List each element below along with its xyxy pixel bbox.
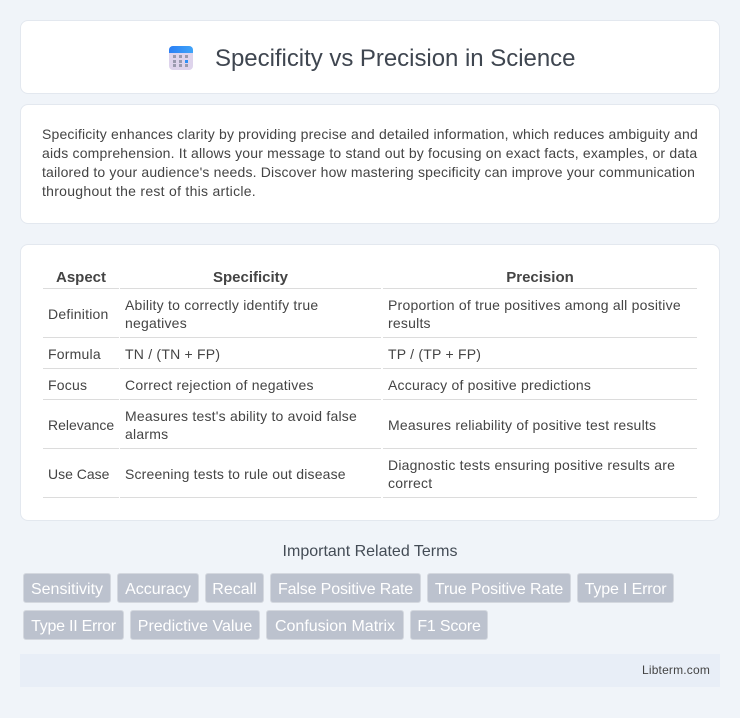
tag: Sensitivity [31, 581, 103, 598]
title: Specificity vs Precision in Science [215, 45, 575, 72]
Definition specificity [125, 297, 318, 331]
tag: Confusion Matrix [275, 618, 395, 635]
intro text panel [20, 104, 720, 224]
row: Formula: Formula [48, 346, 101, 362]
tag [23, 573, 111, 603]
Focus specificity: Correct rejection of negatives [125, 377, 314, 393]
tag: Predictive Value [138, 618, 252, 635]
tag [23, 610, 124, 640]
row: Focus: Focus [48, 377, 87, 393]
Definition precision: results [388, 315, 431, 331]
Relevance precision: Measures reliability of positive test results [388, 417, 656, 433]
Use Case precision [388, 457, 675, 491]
Use Case precision: Diagnostic tests ensuring positive results are [388, 457, 675, 473]
comparison table panel [20, 244, 720, 521]
header: Specificity: Specificity [213, 269, 288, 286]
intro paragraph: tailored to your audience's needs. Discover how mastering specificity can improve your communication [42, 164, 695, 180]
intro paragraph: aids comprehension. It allows your message to stand out by focusing on exact facts, examples, or data [42, 145, 697, 161]
tag: Recall [212, 581, 257, 598]
header: Aspect: Aspect [56, 269, 106, 286]
Use Case specificity: Screening tests to rule out disease [125, 466, 346, 482]
tag: Type II Error [31, 618, 116, 635]
Definition precision: Proportion of true positives among all positive [388, 297, 681, 313]
intro paragraph: throughout the rest of this article. [42, 183, 256, 199]
Relevance specificity: alarms [125, 426, 168, 442]
tag [427, 573, 571, 603]
Definition specificity: Ability to correctly identify true [125, 297, 318, 313]
Relevance specificity [125, 408, 357, 442]
Focus precision: Accuracy of positive predictions [388, 377, 591, 393]
tag: Type I Error [585, 581, 666, 598]
tag [117, 573, 199, 603]
Formula specificity: TN / (TN + FP) [125, 346, 220, 362]
Use Case precision: correct [388, 475, 432, 491]
related terms heading: Important Related Terms [283, 543, 457, 560]
tag [577, 573, 674, 603]
row: Relevance: Relevance [48, 417, 114, 433]
icon: calendar [169, 46, 193, 70]
header: Precision: Precision [506, 269, 574, 286]
footer bar [20, 654, 720, 687]
Relevance specificity: Measures test's ability to avoid false [125, 408, 357, 424]
header card [20, 20, 720, 94]
tag: Accuracy [125, 581, 191, 598]
intro paragraph: Specificity enhances clarity by providing precise and detailed information, which reduces ambiguity and [42, 126, 698, 142]
related term tags [23, 573, 674, 640]
tag [410, 610, 488, 640]
Formula precision: TP / (TP + FP) [388, 346, 481, 362]
tag [266, 610, 404, 640]
tag: False Positive Rate [278, 581, 413, 598]
tag: True Positive Rate [435, 581, 563, 598]
Definition specificity: negatives [125, 315, 187, 331]
Definition precision [388, 297, 681, 331]
intro paragraph [42, 126, 698, 199]
tag [270, 573, 421, 603]
footer credit: Libterm.com [642, 663, 710, 677]
tag: F1 Score [417, 618, 481, 635]
tag [205, 573, 264, 603]
row: Definition: Definition [48, 306, 109, 322]
row: Use Case: Use Case [48, 466, 109, 482]
tag [130, 610, 260, 640]
